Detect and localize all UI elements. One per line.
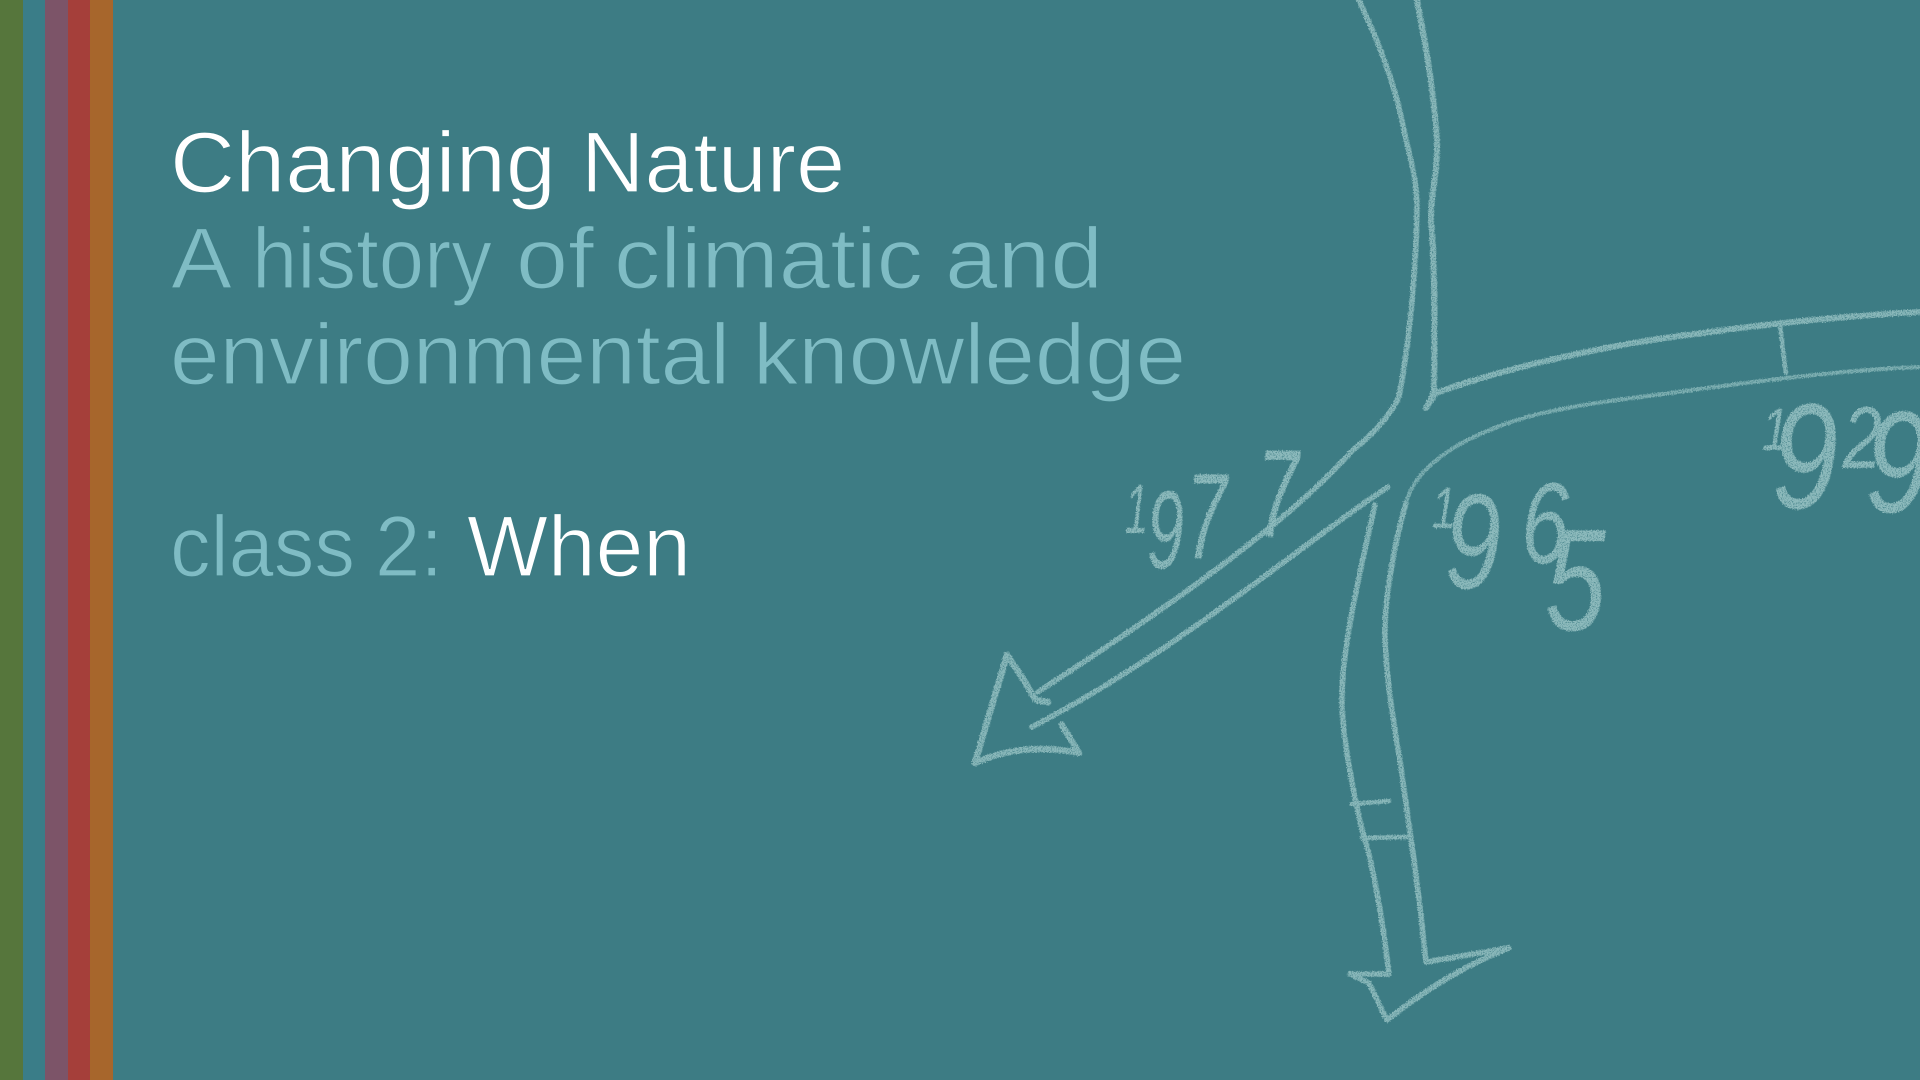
trunk left edge into lower-left arrow — [1038, 0, 1417, 692]
subtitle line 2: knowledge — [753, 307, 1186, 403]
subtitle line 1: climatic — [614, 211, 923, 307]
chalk year: 1977: 7 — [1257, 424, 1301, 564]
class name: When: When — [467, 499, 691, 595]
chalk year: 1965: 6 — [1521, 459, 1570, 588]
subtitle line 2: environmental — [170, 307, 730, 403]
chalk year: 1965: 5 — [1545, 500, 1606, 662]
title block — [170, 115, 1186, 595]
chalk year: 1929 — [1762, 372, 1920, 543]
chalk year: 1929: 1 — [1762, 396, 1789, 463]
class label: 2: — [375, 499, 443, 595]
colour stripes — [0, 0, 113, 1080]
subtitle line 1: history — [252, 211, 492, 307]
lower horizontal branch and down arrow right edge — [1406, 367, 1920, 503]
down arrow shaft and head — [1342, 503, 1509, 1020]
subtitle line 1: A — [171, 211, 233, 307]
chalk sketch: branching arrows — [975, 0, 1920, 1020]
class label: class — [170, 499, 355, 595]
chalk year: 1965: 9 — [1445, 467, 1501, 617]
branch tick — [1780, 325, 1786, 373]
heading: Changing Nature: Changing — [170, 115, 556, 211]
subtitle line 1: of — [516, 211, 595, 307]
lower-left arrow lower edge — [1032, 487, 1388, 727]
subtitle line 1: and — [945, 211, 1103, 307]
chalk year: 1977: 1 — [1125, 471, 1148, 549]
chalk year: 1965: 1 — [1432, 476, 1456, 540]
chalk year: 1929: 2 — [1842, 388, 1882, 487]
trunk right edge and upper branch — [1417, 0, 1920, 408]
down arrow crossbars — [1352, 801, 1407, 838]
chalk year: 1977 — [1125, 424, 1301, 592]
chalk year: 1965 — [1432, 459, 1606, 662]
heading: Changing Nature: Nature — [581, 115, 845, 211]
lower-left arrowhead — [975, 655, 1079, 763]
chalk year: 1977: 7 — [1186, 449, 1230, 585]
chalk year: 1977: 9 — [1147, 470, 1184, 592]
chalk year: 1929: 9 — [1772, 372, 1838, 540]
